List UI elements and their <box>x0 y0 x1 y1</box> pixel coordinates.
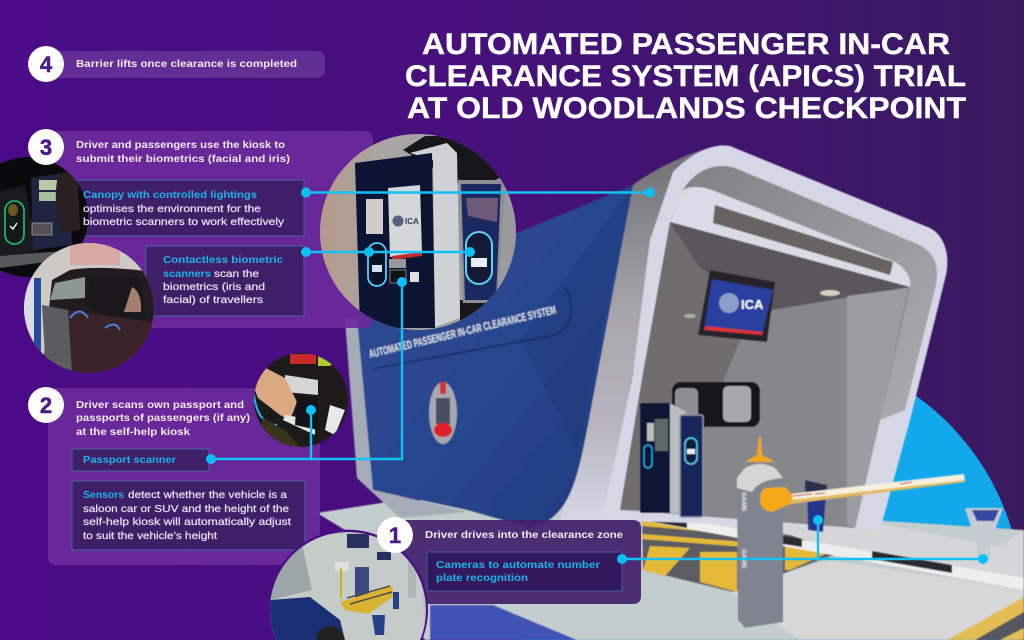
panel: step 1 <box>400 520 641 604</box>
overhead screen <box>698 270 775 342</box>
barrier gate: GAME <box>740 492 747 512</box>
line: biometric scanners <box>301 247 475 257</box>
panel: step 3 <box>48 131 373 328</box>
blue sensor post <box>805 480 827 532</box>
callout: cameras: Cameras to automate number <box>436 559 600 571</box>
line: passport scanner <box>206 277 407 464</box>
step number 2: 2 <box>40 393 52 418</box>
step 3 callout text: Contactless biometric <box>163 254 283 266</box>
kiosk housing <box>345 185 633 528</box>
illustration: APICS canopy and kiosk photo <box>317 145 1024 640</box>
barrier gate <box>737 437 965 628</box>
step 3 heading: submit their biometrics (facial and iris) <box>76 153 290 165</box>
line: cameras <box>617 515 988 564</box>
step 3 heading <box>76 139 290 165</box>
connector lines <box>206 188 988 564</box>
step 3 callout text: biometrics (iris and <box>163 281 265 293</box>
callout box: canopy <box>71 180 304 236</box>
callout: cameras: plate recognition <box>436 572 528 584</box>
step 3 callout text: biometric scanners to work effectively <box>83 216 285 228</box>
title: AUTOMATED PASSENGER IN-CAR <box>422 28 950 61</box>
title: AT OLD WOODLANDS CHECKPOINT <box>407 92 966 125</box>
step 3 callout text: facial) of travellers <box>163 294 263 306</box>
step 2 heading <box>76 399 250 438</box>
step 2 heading: at the self-help kiosk <box>76 426 190 438</box>
panel: step 2 <box>48 388 320 565</box>
title <box>405 28 966 125</box>
step 3 callout text: scan the <box>214 268 259 280</box>
step number 1: 1 <box>389 523 401 548</box>
callout: sensors: detect whether the vehicle is a <box>128 489 287 501</box>
callout: sensors <box>72 481 305 550</box>
step 2 heading: Driver scans own passport and <box>76 399 244 411</box>
barrier gate: GAME <box>740 549 747 569</box>
photo: large kiosk close-up: ICA <box>405 217 419 226</box>
callout: sensors: to suit the vehicle’s height <box>83 530 217 542</box>
step number 3 <box>28 129 64 165</box>
callout: sensors: self-help kiosk will automatically adjust <box>83 516 291 528</box>
photo: green check scanner <box>0 157 88 277</box>
blue circle backdrop <box>518 349 1022 640</box>
callout: sensors: Sensors <box>83 489 124 501</box>
step 1 heading: Driver drives into the clearance zone <box>425 529 623 541</box>
panel: step 4 <box>28 46 325 82</box>
callout: sensors: saloon car or SUV and the height of the <box>83 503 289 515</box>
step 4 text: Barrier lifts once clearance is completed <box>76 58 297 70</box>
ICA crest on kiosk <box>429 382 457 444</box>
camera stand <box>965 508 1003 560</box>
line: canopy <box>301 188 655 198</box>
title: CLEARANCE SYSTEM (APICS) TRIAL <box>405 60 966 93</box>
step 3 callout text: Canopy with controlled lightings <box>83 189 257 201</box>
step 2 heading: passports of passengers (if any) <box>76 412 250 424</box>
step 3 callout text: optimises the environment for the <box>83 203 261 215</box>
callout: passport scanner <box>72 449 209 471</box>
step 4 number: 4 <box>40 52 53 77</box>
photo: car at kiosk <box>24 243 154 375</box>
step 3 heading: Driver and passengers use the kiosk to <box>76 139 285 151</box>
step 3 callout text: scanners <box>163 268 211 280</box>
photo: car entering clearance lane <box>268 530 428 640</box>
kiosk lettering: AUTOMATED PASSENGER IN-CAR CLEARANCE SYSTEM <box>368 304 557 361</box>
canopy side face <box>560 145 723 520</box>
callout: passport scanner: Passport scanner <box>83 454 176 466</box>
ground <box>317 500 1024 640</box>
step number 3: 3 <box>40 135 52 160</box>
step 3 callout text <box>83 189 285 306</box>
photo: passport scanner <box>253 353 351 447</box>
step number 1 <box>377 517 413 553</box>
step 4 number <box>28 46 64 82</box>
callout: cameras <box>427 552 622 591</box>
step number 2 <box>28 387 64 423</box>
overhead screen: ICA <box>741 297 764 312</box>
small kiosks <box>640 403 703 517</box>
callout box: contactless scanners <box>146 246 304 316</box>
canopy frame <box>600 146 947 530</box>
overhead camera housing <box>672 382 760 427</box>
photo: large kiosk close-up <box>320 134 516 330</box>
